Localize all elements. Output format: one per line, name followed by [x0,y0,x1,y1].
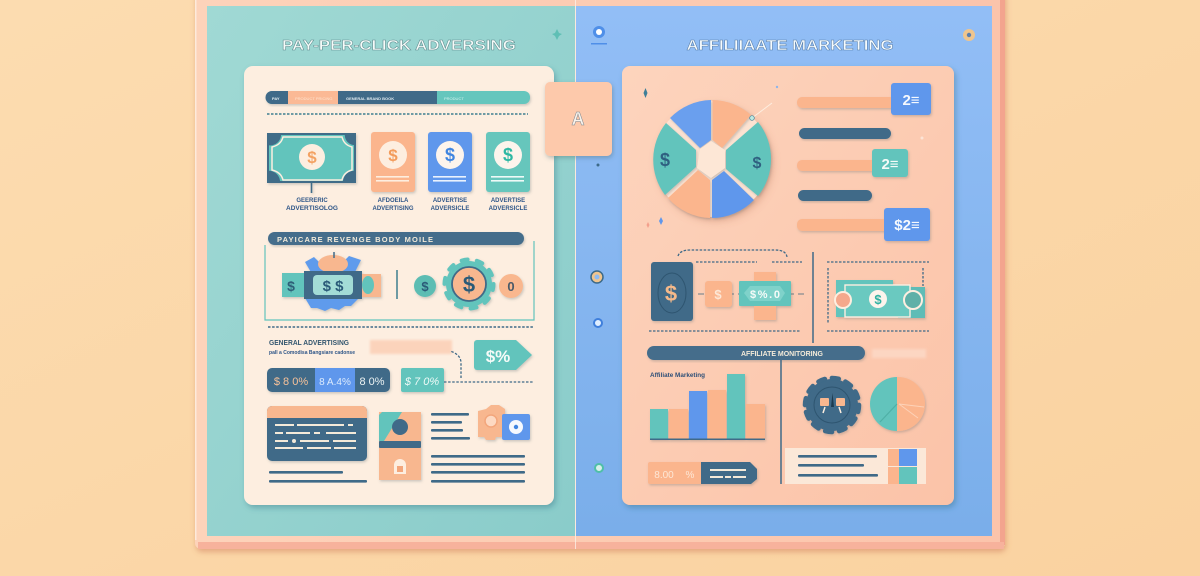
section bar: revenue model [268,232,524,245]
card captions: GEERERIC [296,198,328,204]
card captions [286,198,527,212]
panel: left white card [244,66,554,505]
text block: general advertising [269,338,355,356]
center tile: A badge [545,82,612,156]
revenue model section box [265,241,534,320]
segmented header bar: GENERAL BRAND BOOK [346,96,394,101]
center tile: A badge: A [572,109,584,129]
card captions: ADVERTISOLOG [286,206,338,212]
icon: dollar gear: $ [463,272,475,297]
bar row 2 [799,128,891,139]
arrow: dotted connector [444,351,534,382]
icon: orange price card: $ [388,146,398,165]
icon: banknote stack: $ [874,292,882,307]
text block: general advertising: GENERAL ADVERTISING [269,338,349,347]
icon: peach coin [499,274,523,298]
segmented percentage bar [267,368,390,392]
pie wheel chart: $ [753,155,762,172]
card captions: ADVERTISE [491,198,525,204]
segmented header bar: PAY [272,96,280,101]
card captions: ADVERTISING [372,206,414,212]
bar chart [650,374,765,440]
card captions: ADVERSICLE [431,206,469,212]
percent chip [401,368,444,392]
panel: blue page background [576,6,992,536]
card captions: AFDOEILA [378,198,409,204]
icon: cross value tile: $%.0 [750,289,780,301]
segmented header bar: PRODUCT [444,96,464,101]
vertical divider [780,360,782,484]
segmented header bar: PRODUCT PRICING [295,96,332,101]
percent chip: $ 7 0% [404,376,439,388]
tag: percent arrow [474,340,532,370]
section bar: affiliate monitoring: AFFILIATE MONITORING [741,351,824,358]
icon: teal price card: $ [503,145,513,165]
icon: dollar wallet card [651,262,693,321]
heading: affiliate marketing: AFFILIIAATE MARKETING [686,37,894,54]
value tag: % [686,470,695,481]
icon: small pie chart [870,377,925,431]
browser window card [267,406,367,461]
icon: dollar coin [414,275,436,297]
bar row 4 [798,190,872,201]
icon: banknote: $ [307,148,317,167]
text lines beside profile card [431,413,525,483]
section bar: affiliate monitoring [647,346,865,360]
icon: cash machine: $ $ [323,278,344,295]
pie wheel chart: $ [660,150,670,170]
icon: banknote stack [835,280,925,318]
icon: blue price card [428,132,472,192]
icon: cash machine: $ [287,278,295,294]
bar row 5 with value [797,208,930,241]
text lines under browser card [269,471,367,483]
icon: blue price card: $ [445,145,455,165]
segmented percentage bar: 8 A.4% [319,377,351,388]
icon: cross value tile [739,272,791,320]
icon: badge and shield [478,405,530,440]
text block: general advertising: pall a Comodisa Bangsiare cadonse [269,350,355,356]
icon: profile card [379,412,421,480]
icon: orange price card [371,132,415,192]
vertical divider [812,252,814,343]
icon: navy gear [805,378,859,432]
segmented header bar [266,91,530,104]
page spine line [574,0,576,549]
label: affiliate marketing: Affiliate Marketing [650,372,705,379]
card captions: ADVERTISE [433,198,467,204]
section bar: revenue model: PAYICARE REVENGE BODY MOILE [277,235,433,244]
dotted divider [267,113,528,115]
icon: banknote [267,133,356,193]
divider [396,270,398,299]
segmented percentage bar: 8 0% [359,376,385,388]
value tag [648,462,757,484]
icon: peach dollar tile [705,281,732,307]
panel: right peach card [622,66,954,505]
icon: peach coin: 0 [507,279,515,294]
legend box [785,448,926,484]
bar row 1 with value [797,83,931,115]
icon: dollar wallet card: $ [665,281,677,306]
pie wheel chart [653,100,772,218]
segmented percentage bar: $ 8 0% [274,376,308,388]
sparkles [644,86,924,228]
bar row 5 with value: $2≡ [894,217,920,234]
panel: teal page background [207,6,575,536]
icon: peach dollar tile: $ [714,287,722,302]
icon: teal price card [486,132,530,192]
icon: dollar coin: $ [421,279,429,294]
heading: pay-per-click advertising: PAY-PER-CLICK ADVERSING [282,37,516,54]
arrow: dotted flow connectors [649,250,929,331]
icon: dollar gear [444,260,494,308]
flow connector [698,293,805,295]
value tag: 8.00 [654,470,674,481]
tag: percent arrow: $% [486,347,510,366]
faded note [872,349,926,358]
card captions: ADVERSICLE [489,206,527,212]
decorative icons around the panels [552,26,975,472]
icon: cash machine [282,252,381,311]
bar row 3 with value: 2≡ [881,156,899,173]
book frame [195,0,1005,549]
bar row 1 with value: 2≡ [902,92,920,109]
dotted divider [268,326,533,328]
faded peach note [370,340,452,354]
bar row 3 with value [797,149,908,177]
